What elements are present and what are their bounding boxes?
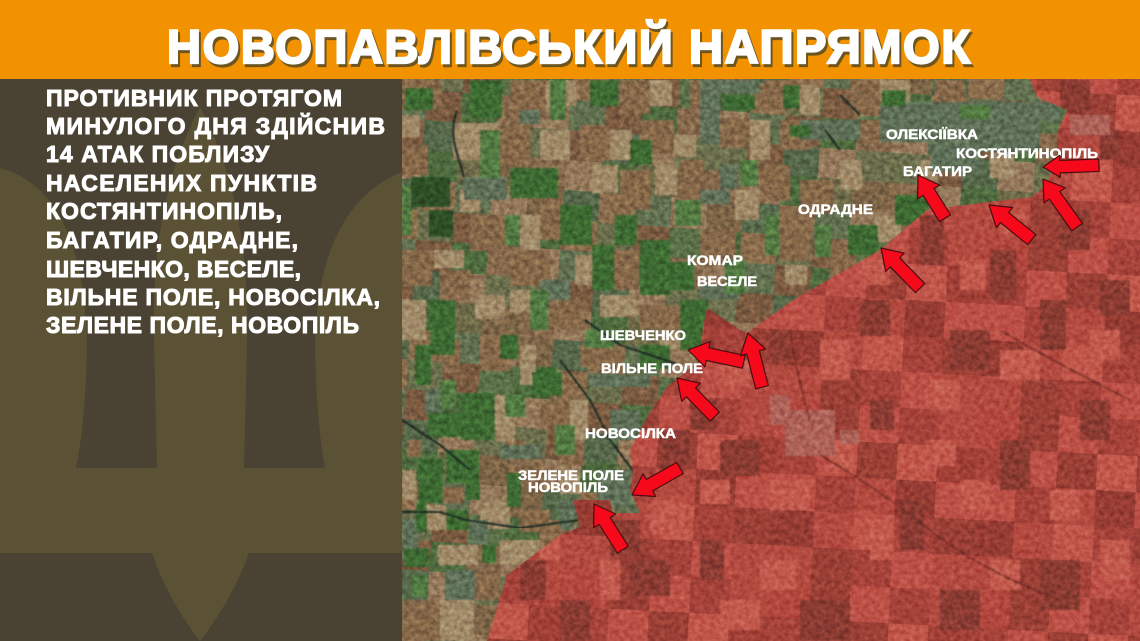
map labels: settlements: НОВОПІЛЬ [528,479,608,495]
map labels: settlements: ЗЕЛЕНЕ ПОЛЕ [518,467,624,483]
arrow: toward Novopil [583,497,634,557]
title: НОВОПАВЛІВСЬКИЙ НАПРЯМОК [167,20,970,73]
arrow: toward Bahatyr [907,168,956,225]
text block: attack summary: ЗЕЛЕНЕ ПОЛЕ, НОВОПІЛЬ [46,312,359,338]
map labels: settlements: ШЕВЧЕНКО [600,327,686,343]
arrow: toward Vilne Pole [668,369,724,426]
text block: attack summary: 14 АТАК ПОБЛИЗУ [46,141,270,167]
text block: attack summary: ШЕВЧЕНКО, ВЕСЕЛЕ, [46,256,301,282]
arrow: toward Zelene Pole [626,457,686,506]
text block: attack summary: ВІЛЬНЕ ПОЛЕ, НОВОСІЛКА, [46,284,380,310]
map labels: settlements: ОЛЕКСІЇВКА [886,126,978,142]
map: farmland fields [402,80,1060,641]
map labels: settlements [518,126,1098,495]
map labels: settlements: ВЕСЕЛЕ [697,273,757,289]
arrow: toward Vesele [735,330,775,390]
map: red occupied territory [487,79,1140,641]
map labels: settlements: КОМАР [687,252,743,268]
map: satellite grain texture [402,79,1140,641]
arrow: toward Odradne [872,239,929,297]
map labels: settlements: БАГАТИР [903,163,972,179]
arrows: red attack directions [583,154,1099,557]
panel: left text panel [0,79,402,641]
arrow: toward Kostiantynopil from south-east [1032,171,1088,235]
text block: attack summary: МИНУЛОГО ДНЯ ЗДІЙСНИВ [46,112,385,139]
map: satellite background [402,79,1140,641]
map labels: settlements: ВІЛЬНЕ ПОЛЕ [601,360,703,376]
text block: attack summary: НАСЕЛЕНИХ ПУНКТІВ [46,170,317,196]
icon: trident emblem watermark [0,107,402,641]
arrow: toward Kostiantynopil from east [1043,154,1099,178]
map labels: settlements: ОДРАДНЕ [798,201,873,217]
text block: attack summary: БАГАТИР, ОДРАДНЕ, [46,227,298,253]
text block: attack summary: КОСТЯНТИНОПІЛЬ, [46,198,282,224]
header band [0,0,1140,79]
text block: attack summary [46,85,385,338]
map: rivers and streams [402,95,860,528]
arrow: toward Shevchenko [685,337,746,375]
arrow: toward Bahatyr east [981,195,1040,250]
map labels: settlements: КОСТЯНТИНОПІЛЬ [956,145,1098,161]
text block: attack summary: ПРОТИВНИК ПРОТЯГОМ [46,85,342,111]
map labels: settlements: НОВОСІЛКА [585,425,676,441]
